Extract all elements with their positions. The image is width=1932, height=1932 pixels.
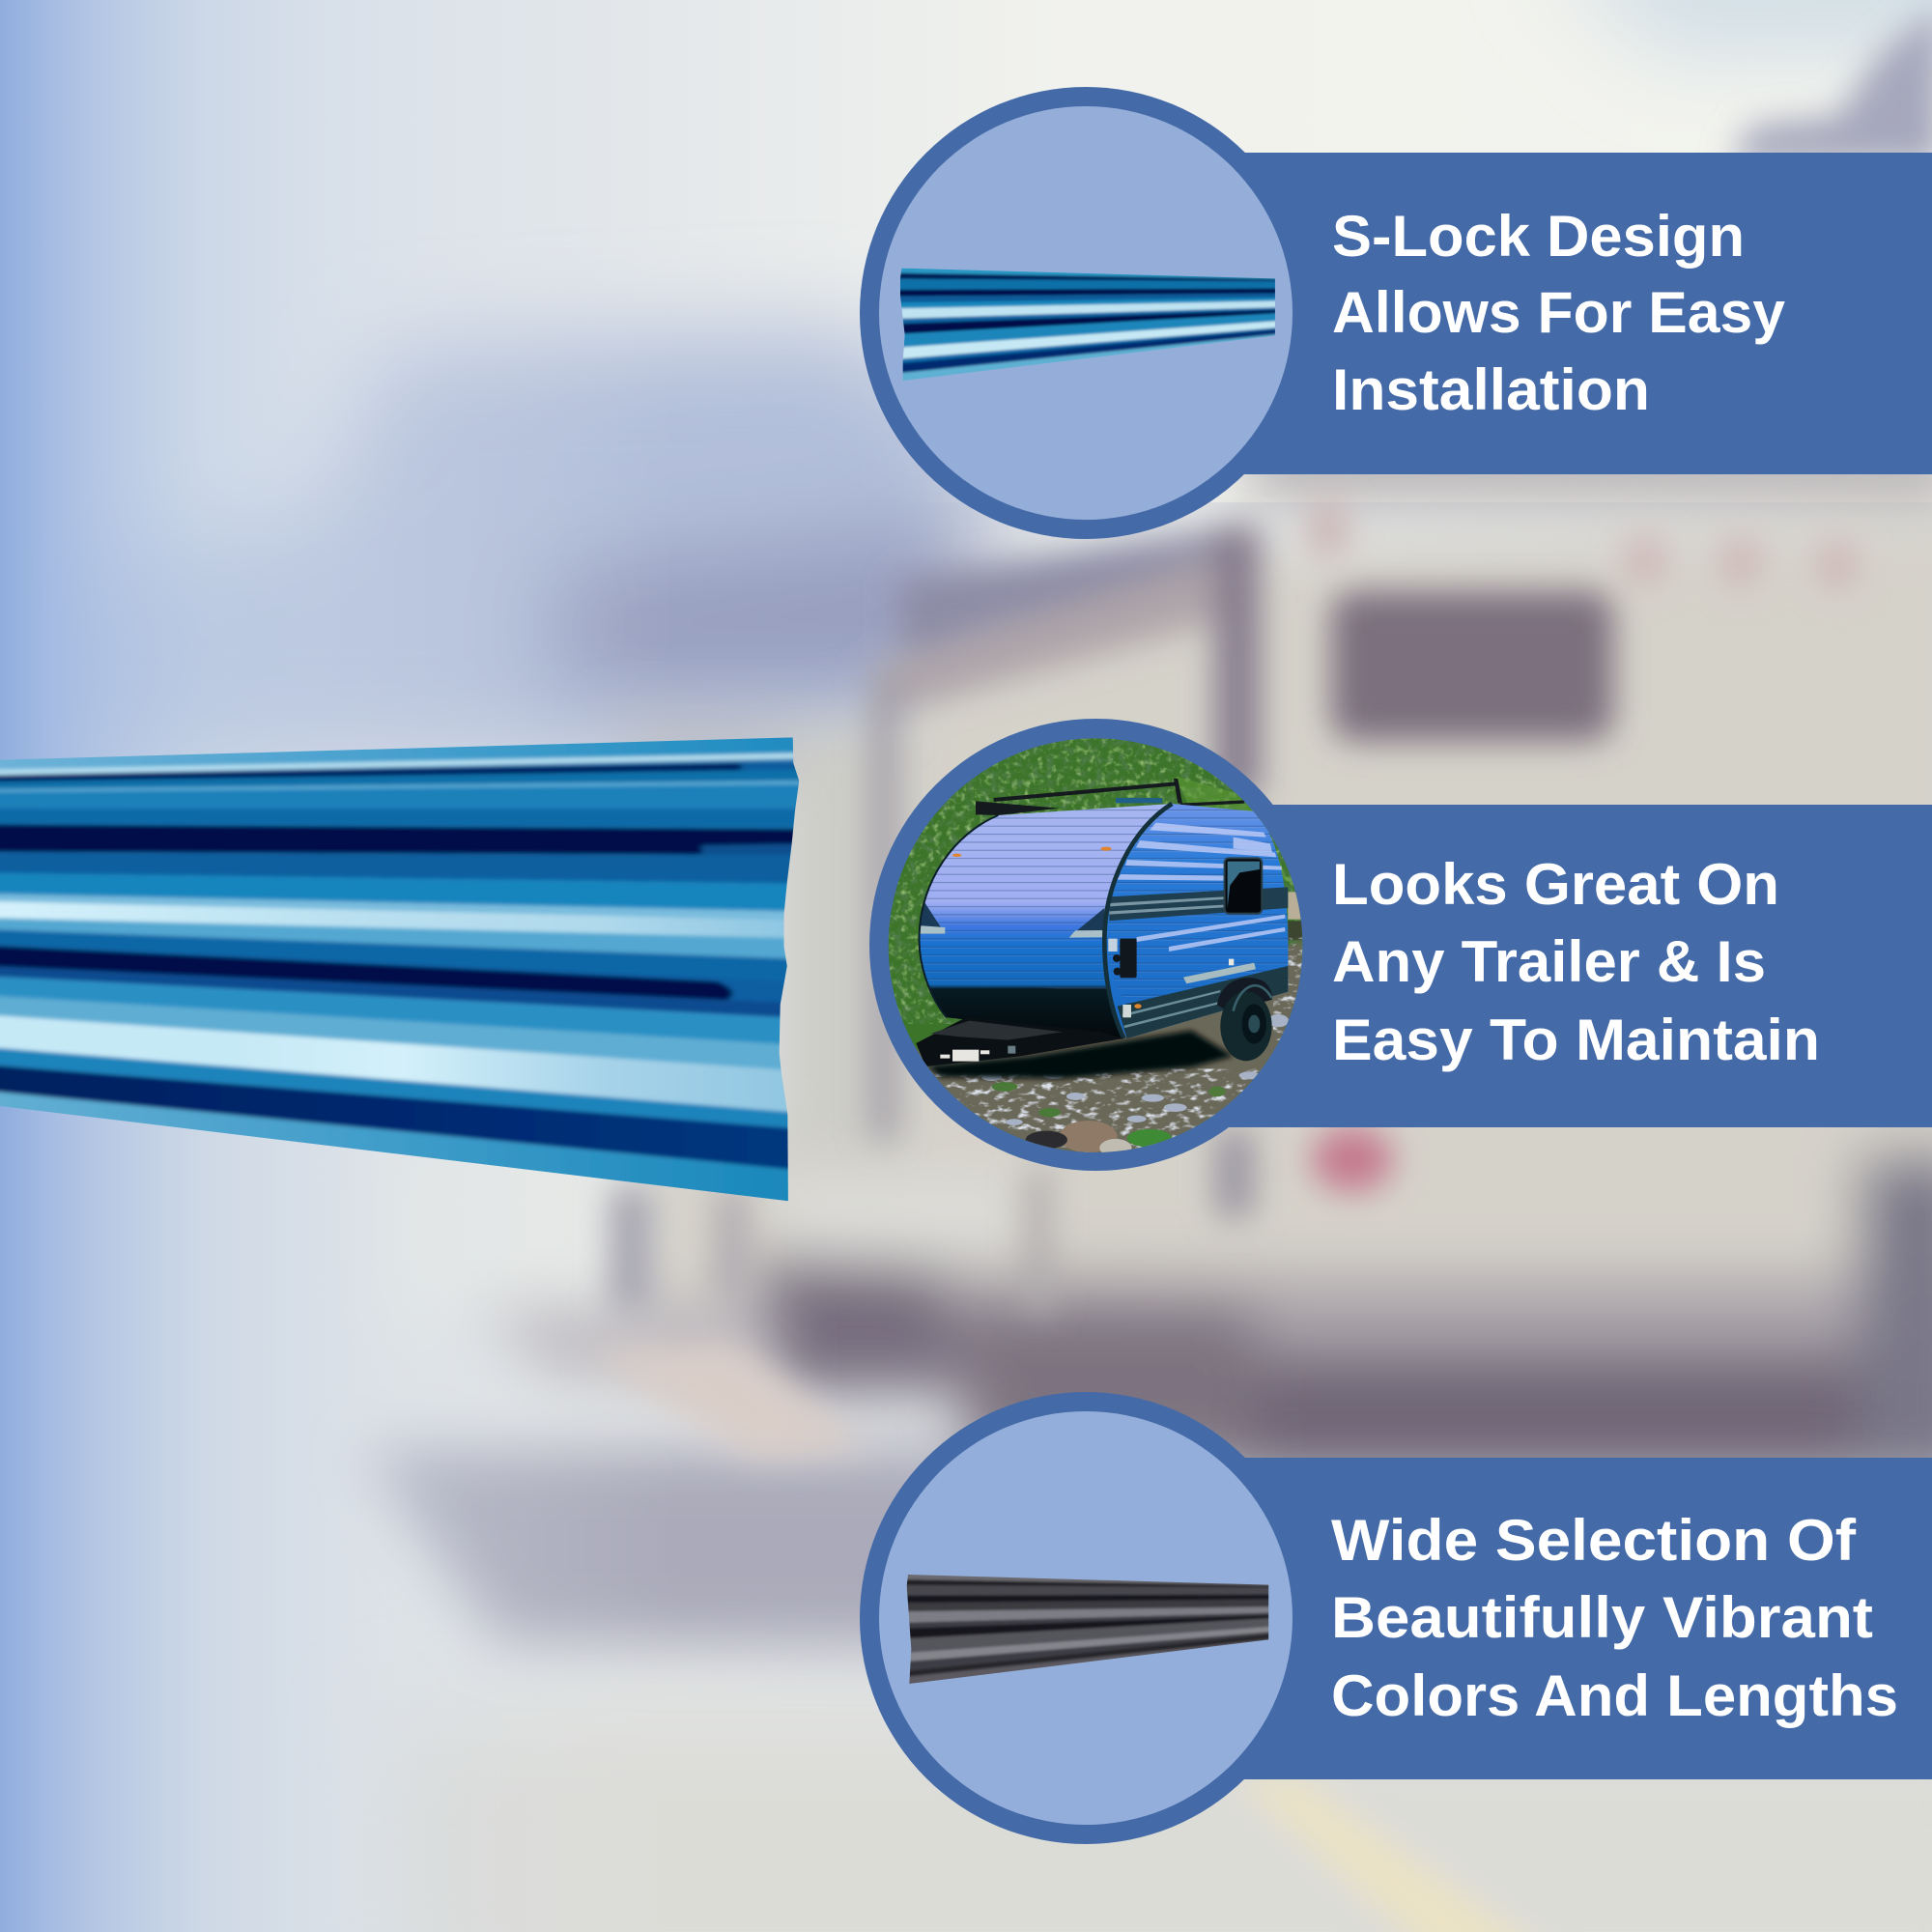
text: wide selection: Colors And Lengths (1331, 1663, 1898, 1728)
banner 1 (1217, 153, 1932, 474)
trailer rear face (920, 804, 1172, 1038)
shadow under trailer (927, 1031, 1234, 1079)
circle inner 1 (879, 106, 1293, 520)
text: S-Lock design: Installation (1332, 357, 1650, 422)
icon: black siding strip (895, 1565, 1282, 1693)
feature 3: banner and circle (860, 1392, 1932, 1844)
trailer side wall (1106, 804, 1288, 1038)
trailer window (1225, 858, 1262, 914)
trailer roof rack (976, 779, 1244, 815)
text: looks great: Easy To Maintain (1332, 1008, 1820, 1072)
banner 2 (1217, 805, 1932, 1127)
text: wide selection: Beautifully Vibrant (1331, 1585, 1873, 1650)
text: looks great: Looks Great On (1332, 852, 1779, 917)
circle inner 3 (879, 1411, 1293, 1825)
trailer door handle and hatch (1108, 939, 1256, 1017)
large blue siding panel (0, 724, 817, 1214)
text: S-Lock design (1332, 204, 1786, 422)
trailer wheel (1217, 978, 1272, 1061)
text: looks great (1332, 852, 1820, 1072)
text: S-Lock design: Allows For Easy (1332, 280, 1786, 345)
circle ring 1 (860, 87, 1312, 539)
text: wide selection: Wide Selection Of (1331, 1508, 1857, 1573)
banner 3 (1217, 1458, 1932, 1779)
feature 1: banner and circle (860, 87, 1932, 539)
trailer tongue frame (916, 1017, 1123, 1066)
trailer edge trim (1104, 804, 1172, 1038)
photo: teardrop trailer (886, 734, 1307, 1166)
circle ring 3 (860, 1392, 1312, 1844)
circle ring 2 (869, 719, 1321, 1171)
ground stones (981, 1014, 1289, 1125)
icon: blue siding strip (900, 269, 1275, 381)
feature 2: banner and trailer photo (869, 719, 1932, 1171)
text: looks great: Any Trailer & Is (1332, 929, 1766, 994)
text: wide selection (1331, 1508, 1898, 1728)
text: S-Lock design: S-Lock Design (1332, 204, 1745, 269)
